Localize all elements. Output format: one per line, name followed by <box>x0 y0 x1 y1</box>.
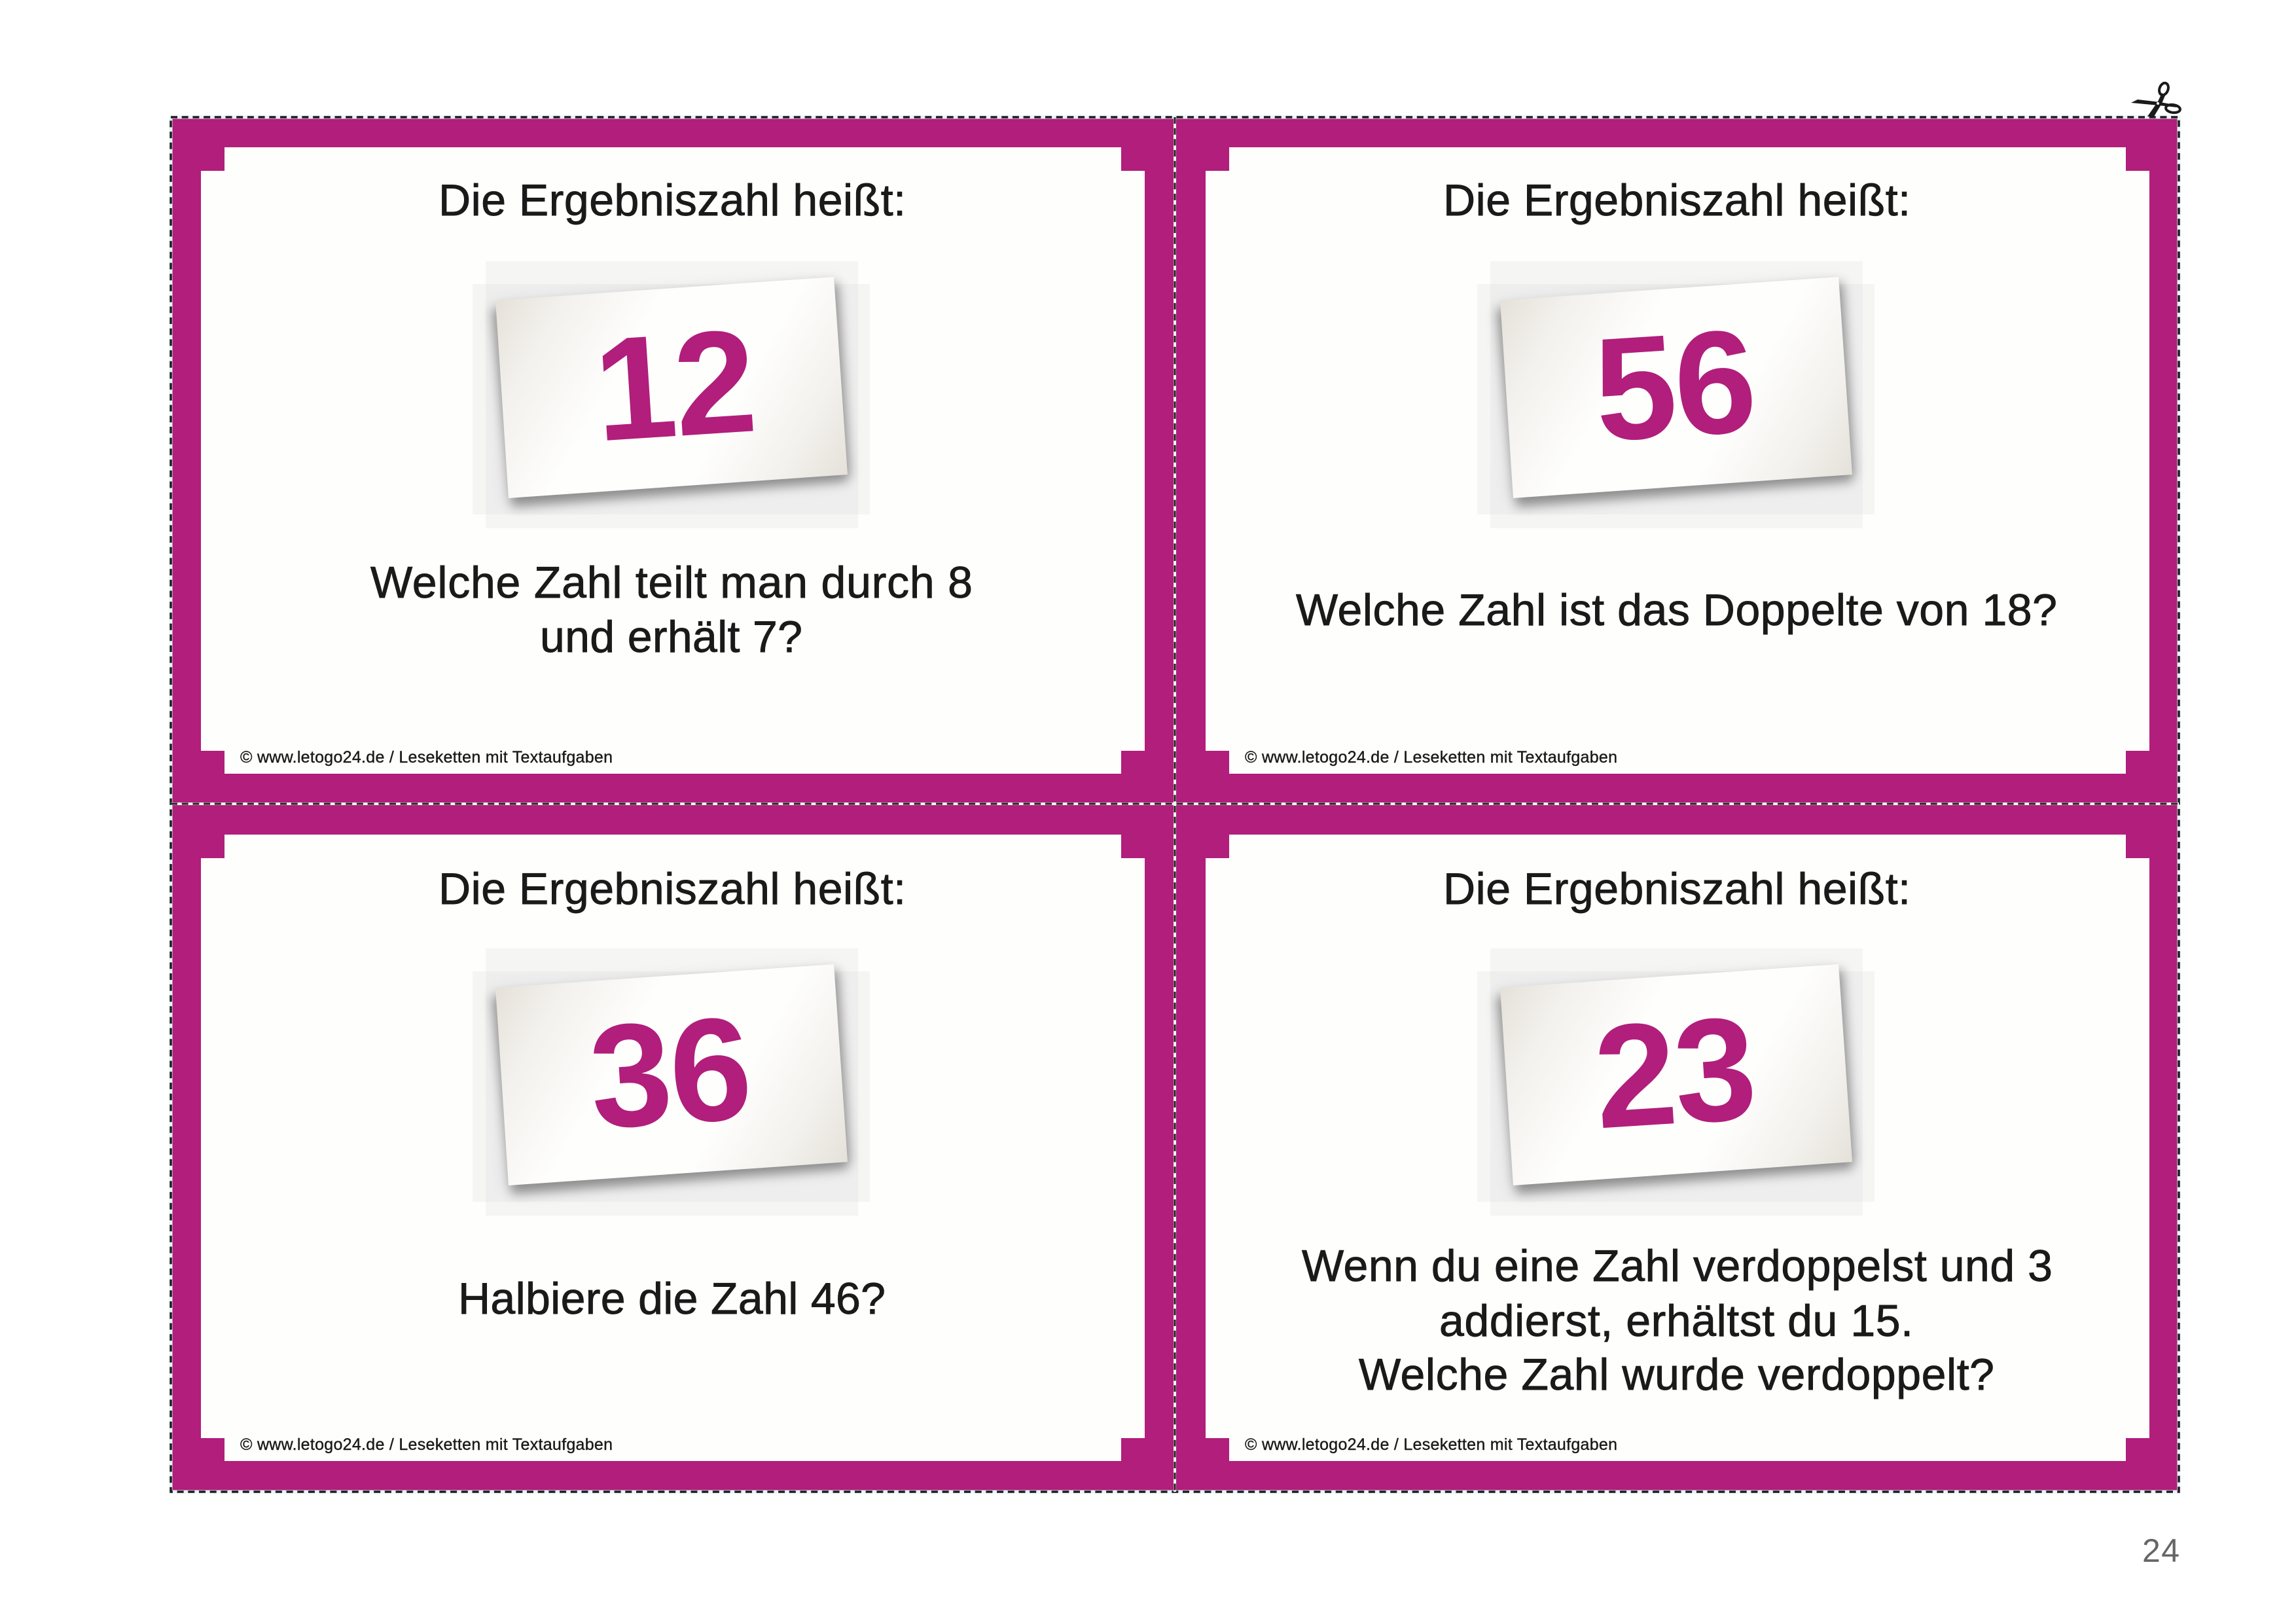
copyright: © www.letogo24.de / Leseketten mit Textaufgaben <box>1245 1435 1617 1454</box>
question: Welche Zahl teilt man durch 8 <box>370 558 973 607</box>
heading: Die Ergebniszahl heißt: <box>1443 175 1910 225</box>
number note: 12 <box>590 298 759 473</box>
number note: 36 <box>585 986 755 1160</box>
number note: 23 <box>1590 986 1759 1160</box>
number note <box>1477 948 1874 1216</box>
number note <box>473 261 870 528</box>
panel: card bottom right <box>1206 835 2149 1461</box>
card white area <box>1206 147 2149 774</box>
question: Wenn du eine Zahl verdoppelst und 3 <box>1302 1241 2053 1291</box>
question: und erhält 7? <box>540 612 802 662</box>
copyright: © www.letogo24.de / Leseketten mit Textaufgaben <box>240 748 613 767</box>
cut lines <box>171 117 2179 1492</box>
number note <box>1477 261 1874 528</box>
number note: 56 <box>1590 298 1759 473</box>
question: Welche Zahl ist das Doppelte von 18? <box>1296 585 2057 635</box>
heading: Die Ergebniszahl heißt: <box>439 175 906 225</box>
panel: card bottom left <box>201 835 1145 1461</box>
panel: card top right <box>1206 147 2149 774</box>
number note <box>473 948 870 1216</box>
page number: 24 <box>2142 1532 2179 1569</box>
copyright: © www.letogo24.de / Leseketten mit Textaufgaben <box>240 1435 613 1454</box>
heading: Die Ergebniszahl heißt: <box>439 864 906 914</box>
card white area <box>201 835 1145 1461</box>
heading: Die Ergebniszahl heißt: <box>1443 864 1910 914</box>
panel: card top left <box>201 147 1145 774</box>
card white area <box>201 147 1145 774</box>
question <box>370 558 973 662</box>
icon: scissors <box>2131 82 2181 117</box>
question <box>1302 1241 2053 1399</box>
question: Welche Zahl wurde verdoppelt? <box>1359 1350 1994 1399</box>
question: addierst, erhältst du 15. <box>1439 1296 1913 1346</box>
card white area <box>1206 835 2149 1461</box>
copyright: © www.letogo24.de / Leseketten mit Textaufgaben <box>1245 748 1617 767</box>
question: Halbiere die Zahl 46? <box>458 1274 886 1324</box>
magenta frame <box>171 117 2179 1492</box>
